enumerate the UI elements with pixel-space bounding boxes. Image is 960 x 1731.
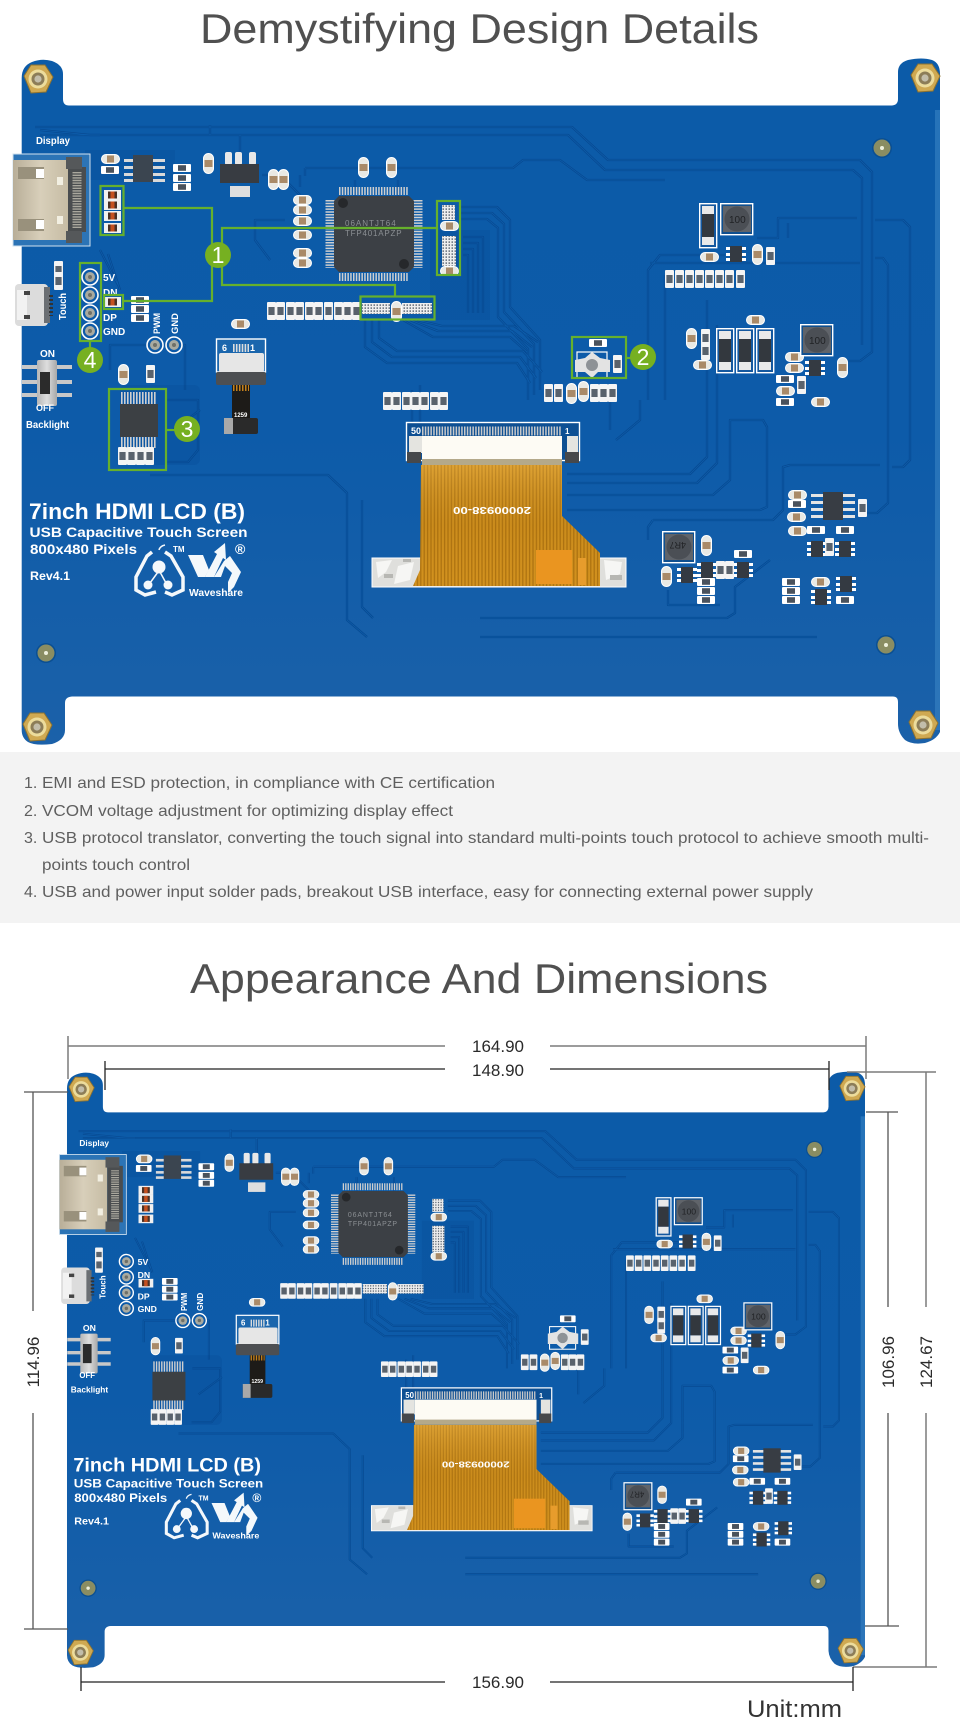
list item 4: USB and power input solder pads, breakout USB interface, easy for connecting external power supply <box>42 884 813 901</box>
panel: dimensioned PCB drawing <box>59 1072 865 1668</box>
PCB artwork <box>13 58 940 745</box>
panel: feature list <box>0 752 960 923</box>
list item 3: 3. <box>24 830 37 847</box>
dimension: height 114.96 <box>24 1092 68 1629</box>
PCB silkscreen labels: Backlight <box>26 420 70 431</box>
mounting vias <box>36 138 896 663</box>
board edge highlight <box>935 110 940 730</box>
list item 3: points touch control <box>42 857 190 874</box>
PCB silkscreen labels: 5V <box>138 1257 148 1267</box>
PCB silkscreen labels: 100 <box>751 1312 766 1322</box>
dimension: overall height 124.67 <box>847 1072 937 1667</box>
dimension: hole spacing width 148.90 <box>105 1061 829 1090</box>
PCB silkscreen labels: 1 <box>565 427 570 436</box>
PCB silkscreen labels: DN <box>103 288 117 299</box>
PCB silkscreen labels: ON <box>83 1323 96 1333</box>
list item 4: 4. <box>24 884 37 901</box>
dimension: overall width 164.90: 164.90 <box>472 1037 524 1056</box>
PCB silkscreen labels: 800x480 Pixels <box>30 541 137 557</box>
list item 1: EMI and ESD protection, in compliance with CE certification <box>42 775 495 792</box>
PCB silkscreen labels <box>26 136 826 599</box>
PCB silkscreen labels: 5V <box>103 273 116 284</box>
PCB silkscreen labels: Touch <box>58 293 69 320</box>
PCB silkscreen labels: ON <box>40 349 55 360</box>
HDMI connector <box>13 154 90 246</box>
PCB silkscreen labels: ® <box>235 541 246 557</box>
PCB silkscreen labels: DN <box>138 1270 150 1280</box>
callout 3: USB protocol translator <box>109 389 200 470</box>
PCB silkscreen labels: USB Capacitive Touch Screen <box>30 524 247 540</box>
PCB silkscreen labels: 20000938-00 <box>452 504 531 515</box>
PCB silkscreen labels: TFP401APZP <box>345 229 402 238</box>
PCB silkscreen labels: PWM <box>152 313 162 334</box>
PCB silkscreen labels: 1 <box>250 343 255 353</box>
Raspberry Pi style logo <box>136 545 183 595</box>
Waveshare W logo <box>188 543 241 593</box>
VCOM potentiometer <box>575 339 622 378</box>
PCB silkscreen labels: Waveshare <box>189 588 243 599</box>
title: Appearance And Dimensions: Appearance And Dimensions <box>190 955 768 1002</box>
PCB silkscreen labels: TFP401APZP <box>348 1221 398 1228</box>
PCB silkscreen labels: 50 <box>411 426 421 436</box>
dimension: hole spacing width 148.90: 148.90 <box>472 1061 524 1080</box>
dark trace regions behind chips <box>85 150 490 465</box>
PCB silkscreen labels: OFF <box>79 1371 95 1380</box>
PCB silkscreen labels: 1 <box>539 1393 543 1400</box>
PCB silkscreen labels: DP <box>138 1292 150 1302</box>
callout 2: VCOM adjustment <box>572 337 656 378</box>
list item 2: VCOM voltage adjustment for optimizing display effect <box>42 803 454 820</box>
dimension: hole spacing width 156.90 <box>81 1667 853 1692</box>
PCB silkscreen labels: DP <box>103 313 117 324</box>
PCB silkscreen labels: 6 <box>241 1319 246 1328</box>
dimension: height 106.96: 106.96 <box>879 1336 898 1388</box>
list item 2: 2. <box>24 803 37 820</box>
PCB silkscreen labels: Touch <box>97 1275 107 1299</box>
PCB silkscreen labels: Rev4.1 <box>30 571 71 583</box>
brass standoffs <box>23 64 940 741</box>
callout 4: USB and power pads: 4 <box>84 347 97 373</box>
PCB silkscreen labels: GND <box>170 312 180 334</box>
PCB silkscreen labels: 100 <box>682 1207 696 1217</box>
dimension: hole spacing width 156.90: 156.90 <box>472 1673 524 1692</box>
callout 4: USB and power pads <box>77 263 103 373</box>
PCB silkscreen labels: TM <box>198 1495 209 1502</box>
PCB silkscreen labels: TM <box>173 545 185 554</box>
PCB silkscreen labels: 4R7 <box>630 1490 644 1499</box>
PCB silkscreen labels: ® <box>252 1491 261 1505</box>
PCB silkscreen labels: 6 <box>222 343 227 353</box>
dimension: overall height 124.67: 124.67 <box>917 1336 936 1388</box>
list item 3: USB protocol translator, converting the touch signal into standard multi-points touch protocol to achieve smooth multi- <box>42 830 929 847</box>
50-pin LCD FPC connector and silver strip <box>372 422 626 587</box>
passive components <box>54 154 867 604</box>
unit note: Unit:mm <box>747 1696 842 1723</box>
list item 3 <box>24 830 929 874</box>
dimension: height 106.96 <box>865 1112 899 1626</box>
PCB silkscreen labels: 50 <box>405 1391 415 1400</box>
PCB silkscreen labels: 1 <box>265 1319 270 1328</box>
header pads <box>82 269 182 353</box>
PCB silkscreen labels <box>71 1138 766 1541</box>
PCB silkscreen labels: USB Capacitive Touch Screen <box>74 1476 263 1490</box>
callout 3: USB protocol translator: 3 <box>181 416 193 442</box>
list item 1: 1. <box>24 775 37 792</box>
PCB silkscreen labels: 800x480 Pixels <box>74 1491 167 1505</box>
panel: annotated PCB back side <box>13 58 940 745</box>
TFP401 main chip <box>330 191 418 277</box>
callout 1: EMI and ESD protection: 1 <box>212 242 224 268</box>
board outline <box>22 58 940 745</box>
slide switch <box>22 360 72 406</box>
PCB silkscreen labels: 7inch HDMI LCD (B) <box>73 1456 261 1477</box>
PCB silkscreen labels: GND <box>103 327 125 338</box>
PCB silkscreen labels: 1259 <box>251 1379 263 1385</box>
PCB silkscreen labels: 06ANTJT64 <box>348 1212 393 1219</box>
PCB silkscreen labels: Display <box>36 136 70 147</box>
PCB silkscreen labels: 4R7 <box>669 540 686 550</box>
PCB silkscreen labels: GND <box>138 1304 157 1314</box>
PCB silkscreen labels: 100 <box>729 215 746 226</box>
title: Demystifying Design Details: Demystifying Design Details <box>200 5 759 52</box>
PCB silkscreen labels: GND <box>196 1292 205 1311</box>
PCB silkscreen labels: Backlight <box>71 1385 108 1395</box>
PCB silkscreen labels: PWM <box>180 1293 189 1311</box>
PCB silkscreen labels: 7inch HDMI LCD (B) <box>29 499 245 524</box>
PCB silkscreen labels: 100 <box>809 336 826 347</box>
PCB silkscreen labels: 06ANTJT64 <box>345 219 397 228</box>
PCB silkscreen labels: 20000938-00 <box>442 1459 510 1469</box>
inductors <box>663 204 833 563</box>
PCB silkscreen labels: Display <box>79 1138 109 1148</box>
copper traces <box>35 125 910 637</box>
callout 2: VCOM adjustment: 2 <box>637 344 649 370</box>
PCB silkscreen labels: Waveshare <box>212 1531 259 1541</box>
dimension: height 114.96: 114.96 <box>24 1337 43 1387</box>
micro USB connector <box>15 284 51 326</box>
PCB silkscreen labels: Rev4.1 <box>74 1517 109 1528</box>
PCB silkscreen labels: OFF <box>36 403 54 413</box>
small chips and regulators <box>120 152 856 605</box>
dimension: overall width 164.90 <box>68 1036 866 1079</box>
PCB silkscreen labels: 1259 <box>234 413 248 419</box>
6-pin touch FFC connector <box>216 339 266 434</box>
callout 1: EMI and ESD protection <box>100 186 460 320</box>
